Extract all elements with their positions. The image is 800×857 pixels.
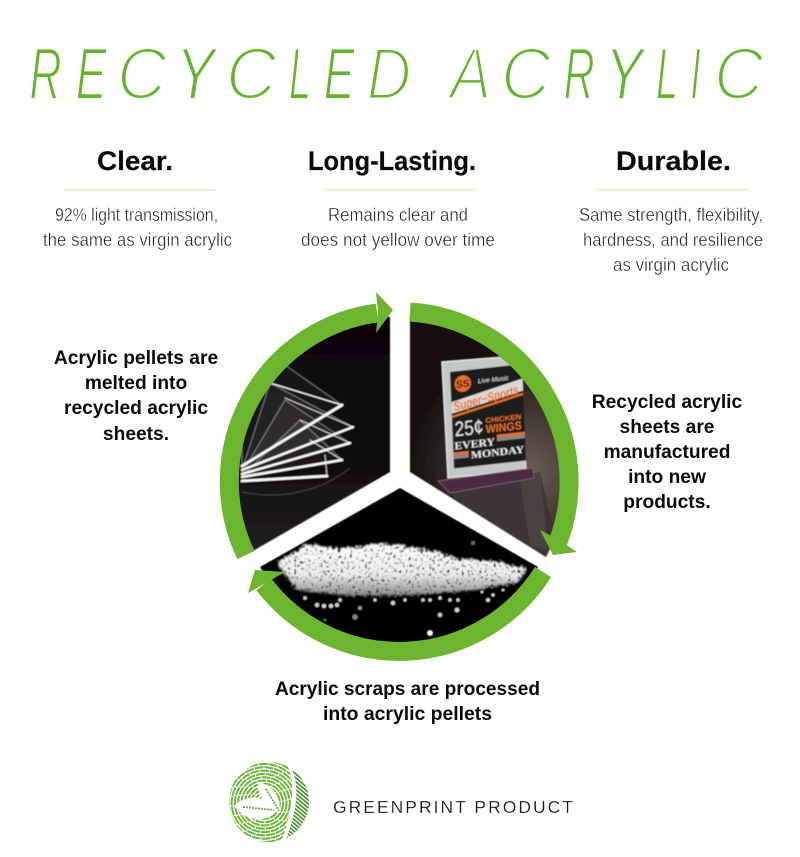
icon: greenprint logo <box>229 762 309 842</box>
stand base <box>438 468 534 493</box>
poster artwork: Live Music <box>478 375 509 385</box>
label: pellets to sheets: melted into <box>85 373 187 394</box>
brand name: GREENPRINT PRODUCT <box>333 797 573 817</box>
heading: long-lasting: Long-Lasting. <box>308 146 476 176</box>
title: C <box>226 34 278 115</box>
text: clear description <box>43 205 232 250</box>
label: pellets to sheets: recycled acrylic <box>64 398 208 419</box>
poster artwork: 25¢ <box>454 415 484 442</box>
label: sheets to products: Recycled acrylic <box>592 392 743 413</box>
photo: sign product <box>409 316 560 558</box>
text: durable description: Same strength, flexibility, <box>579 205 763 225</box>
text: durable description: as virgin acrylic <box>613 255 729 275</box>
scattered pellets <box>303 541 504 636</box>
title: A <box>446 34 491 115</box>
label: scraps to pellets: into acrylic pellets <box>323 704 492 725</box>
title: C <box>501 34 552 115</box>
title: C <box>117 34 168 115</box>
text: long-lasting description <box>301 205 495 250</box>
text: durable description: hardness, and resilience <box>583 230 763 250</box>
ring arrow: pellets stage <box>248 570 543 651</box>
label: pellets to sheets: sheets. <box>103 424 169 445</box>
title: I <box>690 34 701 115</box>
title: C <box>714 34 765 115</box>
ring arrow: sheets stage <box>229 292 393 555</box>
label: sheets to products <box>592 392 743 513</box>
title: L <box>289 34 311 115</box>
poster artwork: WINGS <box>485 420 522 436</box>
poster artwork: EVERY <box>454 436 495 453</box>
poster artwork <box>450 364 526 468</box>
text: long-lasting description: does not yellow over time <box>301 230 495 250</box>
title: L <box>656 34 678 115</box>
label: scraps to pellets: Acrylic scraps are processed <box>275 679 540 700</box>
label: sheets to products: into new <box>628 467 706 488</box>
poster artwork: Super~Sports <box>452 382 520 414</box>
title: R <box>564 34 595 115</box>
label: scraps to pellets <box>275 679 540 725</box>
photo: acrylic pellets <box>260 487 538 642</box>
poster artwork: SS <box>456 378 470 391</box>
poster artwork: MONDAY <box>471 445 525 462</box>
label: sheets to products: sheets are <box>620 417 715 438</box>
column: long-lasting <box>301 146 495 250</box>
text: long-lasting description: Remains clear and <box>328 205 468 225</box>
label: pellets to sheets <box>54 348 218 445</box>
cycle diagram <box>220 292 585 665</box>
title: E <box>324 34 355 115</box>
acrylic sign holder <box>442 356 526 478</box>
pellet pile <box>277 543 527 596</box>
text: clear description: 92% light transmission, <box>55 205 218 225</box>
title: R <box>29 34 62 115</box>
label: pellets to sheets: Acrylic pellets are <box>54 348 218 369</box>
heading: clear: Clear. <box>97 146 173 176</box>
photo: acrylic sheets <box>238 316 391 554</box>
text: clear description: the same as virgin acrylic <box>43 230 232 250</box>
label: sheets to products: products. <box>623 492 711 513</box>
title: E <box>76 34 107 115</box>
title: D <box>367 34 411 115</box>
column: durable <box>579 146 763 275</box>
column: clear <box>43 146 232 250</box>
title: Y <box>176 34 219 115</box>
ring arrow: product stage <box>410 312 577 555</box>
title: Y <box>605 34 647 115</box>
heading: durable: Durable. <box>616 146 731 176</box>
poster artwork: CHICKEN <box>485 412 521 425</box>
label: sheets to products: manufactured <box>604 442 730 463</box>
text: durable description <box>579 205 763 275</box>
